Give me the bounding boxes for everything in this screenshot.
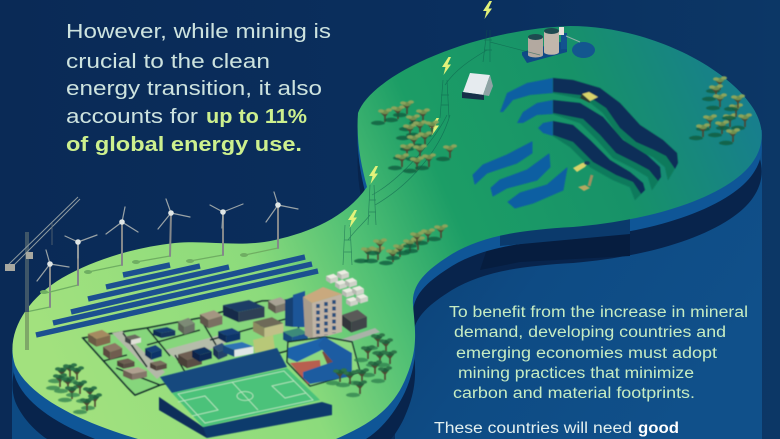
pitch xyxy=(172,368,320,427)
turbine 6 xyxy=(240,192,298,257)
pit terraces: shadowed walls xyxy=(553,78,678,194)
mining trucks xyxy=(573,92,598,191)
open-pit mine xyxy=(473,78,678,208)
text: developing countries: To benefit from the increase in mineral xyxy=(449,304,748,321)
lightning bolts xyxy=(348,1,492,228)
wind turbines xyxy=(26,192,298,312)
text: mining energy use: energy transition, it also xyxy=(66,78,322,100)
solar panel rows xyxy=(36,257,318,335)
trees: neck xyxy=(354,224,448,265)
island column xyxy=(12,130,762,439)
turbine 2 xyxy=(40,235,97,294)
trees: lower lobe right xyxy=(326,333,397,397)
school building xyxy=(287,337,360,386)
text: mining energy use: accounts for xyxy=(66,106,198,128)
text: developing countries xyxy=(449,304,748,402)
pit terraces: lower blue bands xyxy=(473,142,567,208)
turbine 5 xyxy=(186,204,243,263)
town xyxy=(83,270,380,395)
front wall xyxy=(159,397,332,438)
white shed xyxy=(462,73,493,100)
white rooftop units xyxy=(326,270,368,306)
houses xyxy=(88,330,110,347)
text: mining energy use: of global energy use. xyxy=(66,134,302,156)
trees: lower lobe left xyxy=(46,363,102,414)
cast shadow on column xyxy=(480,225,630,270)
text: mining energy use: However, while mining is xyxy=(66,21,331,43)
text: developing countries: carbon and material footprints. xyxy=(453,385,695,402)
text: mining energy use: crucial to the clean xyxy=(66,51,270,73)
town ground and roads xyxy=(83,300,300,395)
trees: upper lobe right xyxy=(689,76,752,145)
text: good: good xyxy=(638,420,679,437)
construction crane xyxy=(5,197,80,350)
football stadium xyxy=(159,348,332,438)
turbine 3 xyxy=(84,207,138,274)
text: developing countries: demand, developing countries and xyxy=(454,324,726,341)
pit terraces: sunlit left walls xyxy=(500,78,553,136)
pit terraces: green inner walls xyxy=(553,78,678,200)
text: developing countries: emerging economies must adopt xyxy=(456,345,718,362)
blue annex xyxy=(285,291,305,327)
turbine 4 xyxy=(132,199,190,264)
power lines and pylons xyxy=(343,30,540,265)
storage tanks and dome xyxy=(522,27,595,63)
text: developing countries: mining practices that minimize xyxy=(458,365,694,382)
trees: upper lobe left xyxy=(371,100,457,173)
turbine 1 xyxy=(26,250,69,312)
text: mining energy use xyxy=(66,21,331,156)
shaded rim section xyxy=(500,215,630,246)
text: mining energy use: up to 11% xyxy=(206,106,307,128)
back stand xyxy=(160,348,287,393)
office tower xyxy=(303,287,342,340)
text: good: These countries will need xyxy=(434,420,632,437)
